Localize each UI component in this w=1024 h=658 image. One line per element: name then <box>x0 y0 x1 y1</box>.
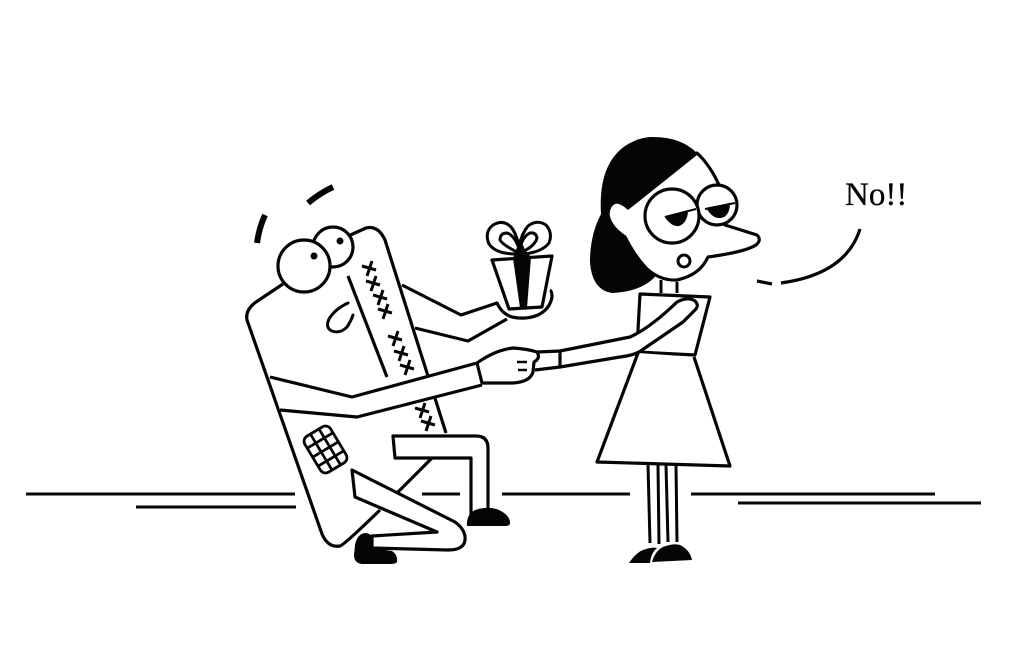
card number crosses <box>362 261 435 431</box>
thigh and standing leg <box>393 436 488 517</box>
chip <box>302 424 349 475</box>
character: credit card <box>247 187 552 564</box>
woman's skirt <box>597 353 730 466</box>
surprise marks <box>257 187 333 243</box>
woman's hair back <box>590 137 697 293</box>
speech arc <box>757 229 860 284</box>
gift body <box>492 256 552 309</box>
kneeling leg <box>352 470 465 550</box>
speech text: No!! <box>845 177 907 213</box>
back foot <box>354 533 397 564</box>
ground lines <box>26 494 981 507</box>
woman's big lens <box>645 189 699 243</box>
gift box <box>487 222 552 309</box>
woman's small lens <box>697 185 737 225</box>
woman's right shoe <box>652 544 692 562</box>
gift bow <box>487 222 550 254</box>
arm holding gift <box>402 285 552 341</box>
woman's neck <box>661 280 677 293</box>
card small eye <box>313 227 353 267</box>
woman's torso <box>637 294 710 355</box>
woman's arm <box>560 299 697 367</box>
card stripe line <box>348 276 387 377</box>
woman's left shoe <box>629 548 657 563</box>
gift ribbon <box>513 240 531 308</box>
card big eye <box>278 240 330 292</box>
card mouth <box>328 303 353 332</box>
woman's face <box>608 153 759 280</box>
woman's mouth <box>678 255 690 267</box>
woman's hand <box>535 351 560 370</box>
pointing arm outline <box>270 363 482 417</box>
woman's legs <box>648 465 677 544</box>
pointing arm <box>270 363 482 417</box>
front foot <box>467 508 510 526</box>
pointing hand of card <box>477 348 538 383</box>
character: woman <box>477 137 759 563</box>
card body <box>247 228 446 546</box>
